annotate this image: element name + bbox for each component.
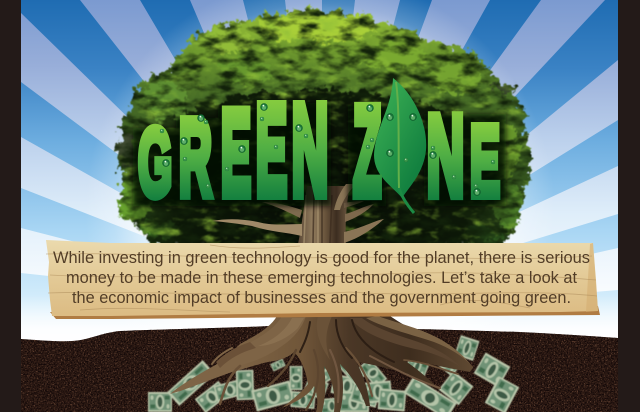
right dark side bar bbox=[618, 0, 640, 412]
soil ground bbox=[21, 326, 618, 412]
tree canopy bbox=[115, 9, 532, 281]
left dark side bar bbox=[0, 0, 21, 412]
wooden sign with intro text bbox=[46, 240, 600, 319]
water droplets on letters bbox=[160, 104, 495, 195]
dollar bills among roots bbox=[148, 335, 519, 412]
word GREEN: R bbox=[179, 96, 212, 218]
word GREEN bbox=[138, 77, 328, 222]
word ZONE letters: N bbox=[427, 92, 464, 219]
sign text line 2: money to be made in these emerging technologies. Let’s take a look at bbox=[66, 268, 577, 287]
letter shadow bbox=[133, 103, 506, 206]
tree trunk and branches bbox=[212, 184, 384, 244]
word ZONE letters: Z bbox=[353, 81, 381, 222]
sky background with sun rays bbox=[21, 0, 618, 345]
sign board bbox=[46, 240, 598, 316]
word ZONE letters: E bbox=[470, 107, 500, 217]
title: Green Zone lettering bbox=[133, 77, 506, 222]
icon: leaf forming the letter O bbox=[374, 78, 426, 213]
word GREEN: N bbox=[292, 78, 328, 222]
word GREEN: E bbox=[256, 77, 287, 222]
sign underside bbox=[50, 306, 600, 319]
word ZONE letters bbox=[353, 81, 500, 222]
sign text line 1: While investing in green technology is good for the planet, there is serious bbox=[53, 248, 590, 267]
tree roots bbox=[170, 316, 473, 412]
word GREEN: E bbox=[221, 84, 251, 221]
sign text line 3: the economic impact of businesses and the government going green. bbox=[72, 288, 571, 307]
word GREEN: G bbox=[138, 108, 172, 216]
